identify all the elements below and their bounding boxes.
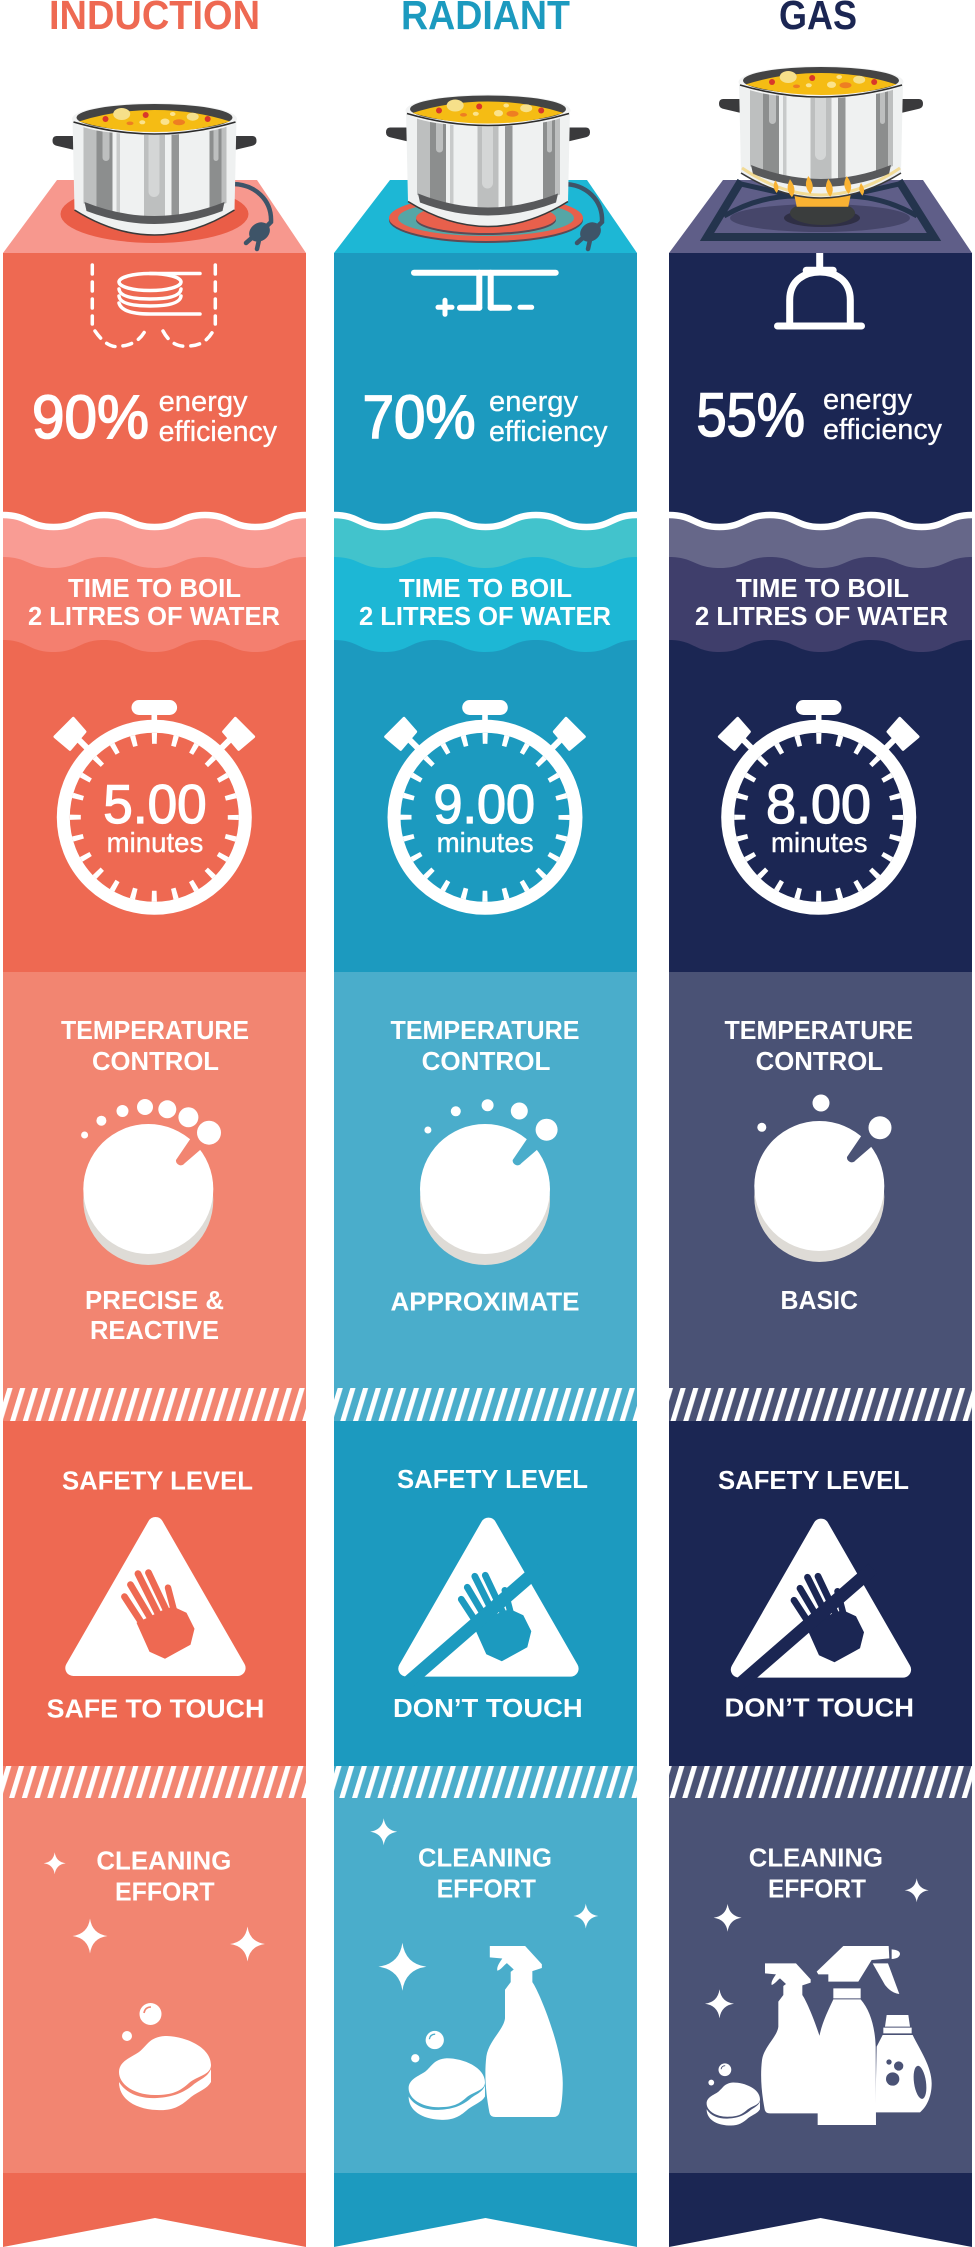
icon: dial with five levels [420,1099,558,1265]
panel: safety level [3,1421,306,1766]
icon: crossed hand on triangle [738,1527,903,1686]
value: 8.00: 8.00 [766,773,871,835]
stat: 70%: 70% [363,383,476,451]
panel: safety level [334,1421,637,1766]
heading: effort: EFFORT [115,1877,215,1907]
label: minutes: minutes [437,827,534,858]
heading: temperature: TEMPERATURE [61,1015,249,1045]
illustration: induction stove and pot [3,103,306,253]
label: basic: BASIC [780,1285,858,1315]
value: 9.00: 9.00 [434,773,535,835]
label: safe to touch: SAFE TO TOUCH [47,1693,264,1723]
icon: stopwatch [55,700,254,908]
icon: dial with three levels [754,1094,892,1262]
icon: sponge [707,2063,760,2126]
heading: safety level: SAFETY LEVEL [718,1465,909,1495]
label: reactive: REACTIVE [90,1315,219,1345]
stat: 55%: 55% [696,381,805,449]
label: minutes: minutes [771,827,868,858]
icon: cleaning bottles [761,1946,932,2125]
icon: radiant element [414,273,556,314]
heading: 2 litres of water: 2 LITRES OF WATER [695,601,948,631]
icon: sparkles [44,1852,265,1962]
heading: temperature: TEMPERATURE [390,1015,580,1045]
heading: control: CONTROL [92,1046,219,1076]
label: efficiency: efficiency [823,414,942,446]
heading: cleaning: CLEANING [418,1843,552,1873]
heading: control: CONTROL [756,1046,883,1076]
label: energy: energy [159,386,248,418]
icon: sponge [119,2003,211,2110]
column: induction [3,0,306,2247]
icon: gas burner [778,253,862,326]
panel: temperature control [334,972,637,1421]
heading: effort: EFFORT [768,1874,866,1904]
label: don't touch: DON’T TOUCH [393,1693,583,1723]
label: efficiency: efficiency [489,416,608,448]
heading: cleaning: CLEANING [749,1843,883,1873]
panel: temperature control [3,972,306,1421]
heading: safety level: SAFETY LEVEL [62,1466,253,1496]
icon: dial with seven levels [81,1099,221,1265]
label: efficiency: efficiency [159,416,277,448]
ribbon tail [334,2173,637,2247]
heading: control: CONTROL [422,1046,551,1076]
panel: efficiency [669,253,972,515]
stat: 90%: 90% [32,383,149,451]
panel: efficiency [3,253,306,515]
icon: sparkles [370,1818,598,1991]
heading: time to boil: TIME TO BOIL [68,573,241,603]
panel: safety level [669,1421,972,1766]
icon: sparkles [705,1878,929,2018]
ribbon tail [3,2173,306,2247]
column: radiant [334,0,637,2247]
icon: induction coil [92,265,215,347]
illustration: gas stove and pot [669,66,972,253]
ribbon tail [669,2173,972,2247]
panel: time to boil [3,505,306,972]
column: gas [669,0,972,2247]
panel: cleaning effort [669,1766,972,2173]
icon: sponge [409,2031,485,2120]
heading: 2 litres of water: 2 LITRES OF WATER [28,601,280,631]
label: energy: energy [489,386,579,418]
heading: 2 litres of water: 2 LITRES OF WATER [359,601,611,631]
heading: effort: EFFORT [437,1874,536,1904]
icon: stopwatch [386,700,584,908]
heading: time to boil: TIME TO BOIL [736,573,909,603]
heading: safety level: SAFETY LEVEL [397,1464,588,1494]
value: 5.00: 5.00 [103,773,207,835]
label: don't touch: DON’T TOUCH [724,1693,914,1723]
icon: stopwatch [719,700,918,908]
panel: temperature control [669,972,972,1421]
panel: time to boil [334,505,637,972]
icon: hand on triangle [73,1525,238,1668]
icon: crossed hand on triangle [405,1526,571,1685]
label: energy: energy [823,384,913,416]
panel: cleaning effort [3,1766,306,2173]
illustration: radiant stove and pot [334,94,637,253]
icon: spray bottle [485,1946,563,2117]
heading: time to boil: TIME TO BOIL [399,573,572,603]
heading: temperature: TEMPERATURE [724,1015,913,1045]
panel: time to boil [669,505,972,972]
label: precise: PRECISE & [85,1285,224,1315]
label: minutes: minutes [107,827,203,858]
label: approximate: APPROXIMATE [390,1287,580,1317]
panel: efficiency [334,253,637,515]
heading: cleaning: CLEANING [96,1845,231,1875]
panel: cleaning effort [334,1766,637,2173]
